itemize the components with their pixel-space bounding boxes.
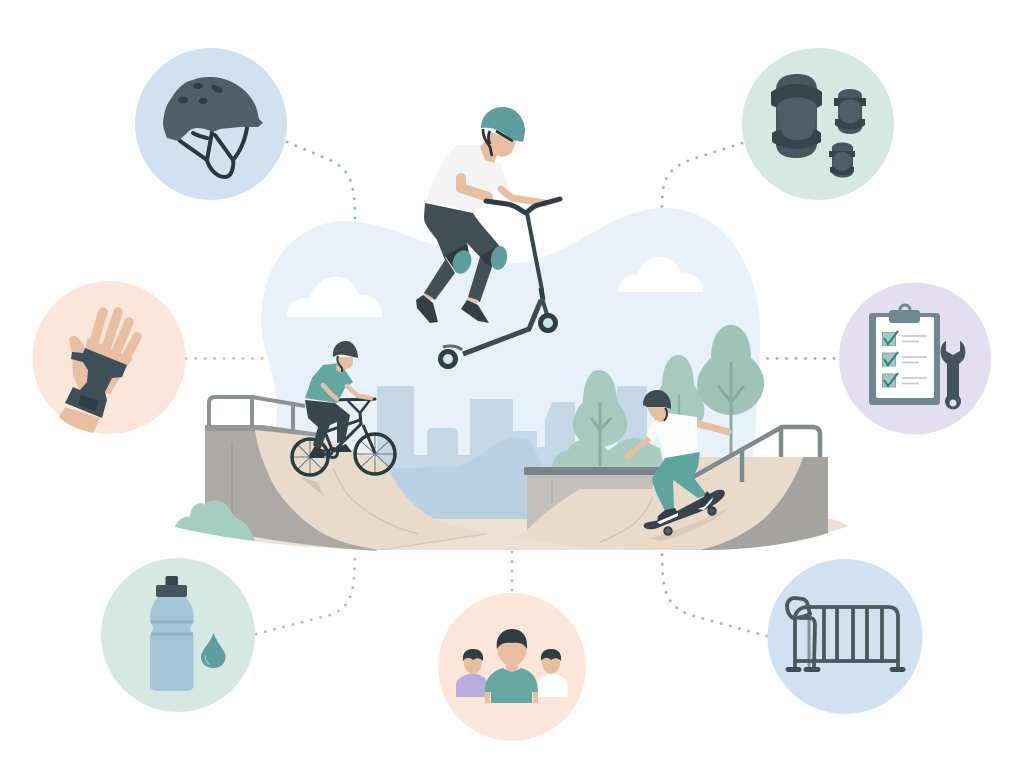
ramp guard rail <box>209 397 305 431</box>
stair rail <box>693 427 820 482</box>
arms <box>461 178 545 203</box>
small pad <box>829 142 855 178</box>
icon: barrier <box>787 598 903 670</box>
platform wall line <box>551 480 553 503</box>
icon: clipboard <box>869 305 940 405</box>
skateboarder <box>627 390 728 541</box>
right gray wall <box>700 457 828 550</box>
shoes <box>657 508 678 522</box>
left arm <box>627 438 650 457</box>
shirt <box>427 145 508 213</box>
helmet strap <box>483 129 513 156</box>
helmet <box>643 390 671 409</box>
neck and face <box>480 132 516 163</box>
icon: left child <box>456 649 488 697</box>
large knee pad <box>771 74 822 158</box>
ramp surface <box>510 457 803 550</box>
bike <box>292 400 395 475</box>
badge: wrist guard <box>32 281 186 434</box>
rider on BMX <box>292 341 395 475</box>
guard pad <box>78 395 99 411</box>
connector: pads to scene <box>662 143 742 208</box>
badge: knee and elbow pads <box>742 48 894 200</box>
knee shadow <box>445 243 498 272</box>
knee pads <box>449 248 475 276</box>
trousers <box>652 452 707 511</box>
shadow <box>648 508 728 541</box>
shoes <box>416 295 438 323</box>
platform wall <box>527 475 653 531</box>
shoes <box>311 444 352 458</box>
bushes behind platform <box>552 438 664 468</box>
connector: bottle to scene <box>256 552 355 634</box>
trousers <box>305 400 350 450</box>
right platform and ramp <box>510 427 828 550</box>
tree back right <box>654 355 704 440</box>
scooter <box>440 213 556 366</box>
city skyline <box>377 386 647 520</box>
bike shadow on ramp <box>300 477 325 497</box>
arms <box>323 385 371 399</box>
ground <box>177 519 848 550</box>
connector: helmet to scene <box>287 142 355 221</box>
icon: helmet <box>163 77 263 177</box>
medium pad <box>834 89 866 134</box>
tree tall right <box>697 325 764 456</box>
icon: bottle <box>150 576 194 691</box>
face <box>647 407 667 422</box>
connector: people to scene <box>511 552 513 592</box>
guard <box>65 348 127 418</box>
palm <box>69 336 133 394</box>
ankle skin <box>422 293 478 306</box>
helmet strap <box>337 356 342 372</box>
connector: barrier to scene <box>662 552 767 636</box>
platform top <box>524 467 660 475</box>
seat <box>312 417 322 422</box>
trousers <box>424 203 500 302</box>
ramp surface crease <box>333 468 418 534</box>
board <box>644 490 725 535</box>
rider on scooter <box>416 107 560 366</box>
ramp top edge <box>205 425 320 438</box>
tree left <box>573 370 627 468</box>
badge: supervising adult and kids <box>438 593 586 741</box>
skyline lower haze <box>385 437 545 520</box>
shrub left <box>175 500 255 541</box>
ramp curved surface <box>255 430 487 550</box>
forearm <box>59 407 100 433</box>
handlebar <box>486 199 560 213</box>
badge: inspection checklist <box>839 282 991 434</box>
central park scene <box>175 107 848 551</box>
icon: right child <box>537 649 568 697</box>
left quarter pipe <box>205 397 487 551</box>
icon: water drop <box>201 633 226 668</box>
ramp crease <box>600 497 653 542</box>
icon: wrench <box>941 341 965 409</box>
face <box>336 357 353 373</box>
ramp lip <box>377 533 487 550</box>
badge: helmet <box>135 48 287 200</box>
helmet strap <box>664 408 667 421</box>
connector: wrist guard to scene <box>186 357 266 360</box>
helmet <box>481 107 525 142</box>
icon: adult <box>485 629 538 703</box>
badge: water bottle <box>101 558 255 712</box>
ramp side wall <box>205 427 377 551</box>
cloud left <box>287 277 382 317</box>
sky blob <box>261 208 760 520</box>
shirt <box>305 363 353 403</box>
helmet <box>333 341 358 358</box>
ramp side wall line <box>231 443 233 513</box>
shirt <box>646 413 698 458</box>
badge: safety barrier <box>768 559 922 714</box>
icon: pads <box>771 74 866 178</box>
icon: hand with wrist guard <box>59 312 137 433</box>
handlebar <box>337 399 375 400</box>
right arm <box>694 423 728 432</box>
connector: checklist to scene <box>758 357 838 360</box>
cloud right <box>618 257 703 292</box>
